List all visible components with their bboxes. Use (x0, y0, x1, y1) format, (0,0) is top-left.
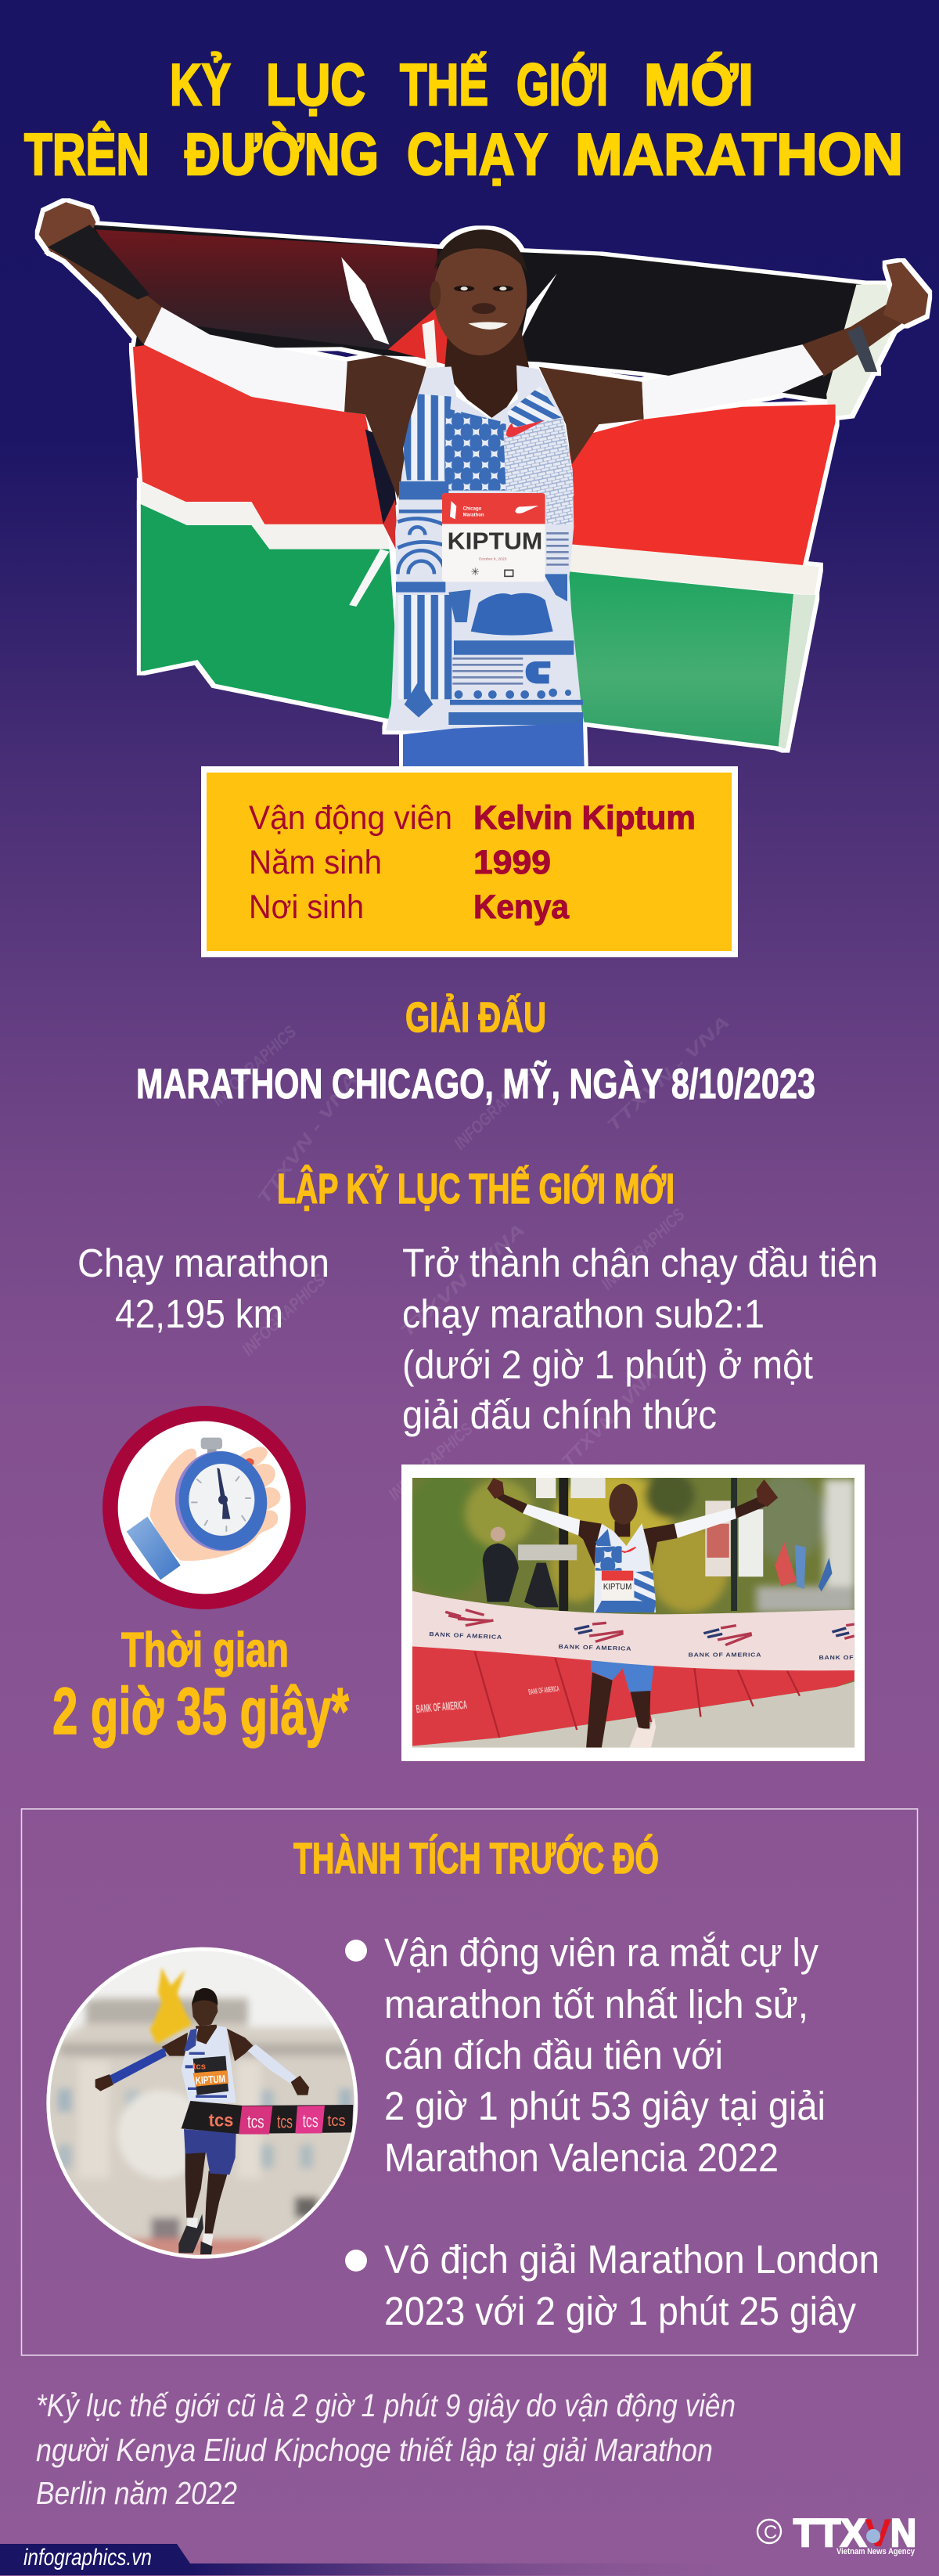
row: birth year: 1999 (473, 844, 551, 881)
watermarks: TTXVN - VNA (397, 1220, 529, 1342)
flag: left green panel (141, 504, 401, 722)
row: athlete (249, 799, 696, 837)
barrier details: BANK OF AMERICA (528, 1684, 560, 1697)
row: birthplace: Kenya (473, 888, 570, 926)
flag: spears and shield (341, 257, 557, 607)
barrier details (416, 1652, 800, 1738)
ribbon logos: BANK OF AMERICA (558, 1644, 631, 1652)
row: birthplace: Nơi sinh (249, 888, 364, 926)
singlet base (386, 366, 585, 730)
row: birth year (249, 844, 551, 881)
fingernail (245, 1458, 254, 1466)
website label: infographics.vn (23, 2545, 152, 2571)
text: first sub 2:01 runner (402, 1241, 878, 1437)
left white arm sleeve (144, 307, 347, 412)
watermarks: INFOGRAPHICS (238, 1270, 329, 1360)
text: first sub 2:01 runner: (dưới 2 giờ 1 phút) ở một (402, 1342, 813, 1387)
bullet: London win: Vô địch giải Marathon London (384, 2237, 880, 2282)
race bib: ✳ (471, 566, 480, 578)
flag: folded upper-left band (95, 229, 437, 349)
title: MARATHON (575, 121, 903, 187)
title: ĐƯỜNG (185, 121, 379, 187)
photo: London finish line (39, 1941, 368, 2270)
flag: right green panel (569, 571, 793, 747)
ribbon logos: BANK OF AMERICA (689, 1652, 761, 1658)
text: time label: Thời gian (121, 1623, 289, 1677)
footnote: Berlin năm 2022 (36, 2475, 237, 2511)
athlete info box (201, 766, 738, 957)
singlet pattern: brick area (503, 417, 574, 495)
bullet: London win: 2023 với 2 giờ 1 phút 25 giây (384, 2289, 856, 2333)
text: first sub 2:01 runner: chạy marathon sub2:1 (402, 1292, 765, 1336)
title (24, 52, 903, 187)
text: marathon distance: 42,195 km (115, 1292, 283, 1336)
finish tape: tcs (247, 2111, 264, 2131)
wristwatch (847, 326, 877, 372)
golden statue (150, 1967, 192, 2045)
left arm skin and hand (39, 202, 426, 499)
race bib: KIPTUM (448, 528, 542, 555)
watermarks: INFOGRAPHICS (450, 1065, 541, 1154)
singlet pattern: lower band (454, 640, 574, 655)
hero photo: Kelvin Kiptum holding the Kenyan flag (39, 202, 928, 767)
swoosh (506, 420, 545, 437)
watch hands (217, 1468, 230, 1519)
text: record time: 2 giờ 35 giây* (52, 1674, 349, 1748)
right white arm sleeve (642, 344, 823, 420)
ribbon logos: BANK OF AMERICA (818, 1655, 892, 1661)
race bib: Marathon (463, 513, 484, 517)
barrier details: BANK OF AMERICA (416, 1699, 468, 1716)
flag: left red panel (133, 344, 387, 525)
wrist cuff (127, 1517, 181, 1580)
watermarks: TTXVN - VNA (254, 1069, 362, 1208)
blurred trees (401, 1472, 855, 1612)
runner: KIPTUM (603, 1582, 631, 1591)
watermarks: INFOGRAPHICS (597, 1205, 689, 1294)
icon ring (103, 1406, 306, 1609)
heading: tournament: GIẢI ĐẤU (405, 994, 546, 1041)
text: first sub 2:01 runner: giải đấu chính thức (402, 1392, 717, 1437)
text: marathon distance (77, 1241, 329, 1336)
heading: new world record: LẬP KỶ LỤC THẾ GIỚI MỚI (277, 1165, 675, 1212)
singlet pattern: diagonal stripes (507, 386, 562, 428)
flag: black band (90, 225, 862, 399)
singlet pattern: arcs (398, 511, 444, 574)
road (412, 1681, 854, 1748)
icon: stopwatch in hand (103, 1406, 306, 1609)
finish tape: tcs (303, 2111, 318, 2131)
title: TRÊN (24, 121, 149, 187)
singlet pattern: upper-left stripes (403, 394, 452, 480)
copyright symbol (757, 2520, 781, 2543)
cameraman and camera (483, 1527, 577, 1607)
bullet: debut record: 2 giờ 1 phút 53 giây tại giải (384, 2084, 826, 2128)
footer ribbon (0, 2544, 751, 2575)
heading: previous achievements: THÀNH TÍCH TRƯỚC ĐÓ (293, 1833, 659, 1882)
race bib (442, 493, 545, 582)
title: GIỚI (516, 52, 608, 117)
finish tape: tcs (327, 2112, 346, 2130)
panel: previous achievements (22, 1809, 917, 2355)
singlet pattern: horizontal lines (452, 658, 523, 686)
photo: Chicago finish line (401, 1465, 892, 1761)
watermarks: INFOGRAPHICS (207, 1021, 300, 1110)
row: athlete: Kelvin Kiptum (473, 799, 696, 837)
TTXVN logo: N (890, 2511, 916, 2555)
watermarks (207, 1012, 733, 1504)
flag: right white stripe (569, 544, 819, 595)
ribbon logos: BANK OF AMERICA (429, 1631, 502, 1641)
finish tape: tcs (277, 2111, 293, 2131)
runner: tcs (193, 2062, 206, 2071)
flag: right pale edge (779, 594, 815, 749)
singlet pattern: cross band (399, 481, 448, 499)
blurred palace (50, 1994, 354, 2255)
singlet pattern: leaf (471, 593, 553, 636)
title: LỤC (266, 52, 365, 117)
title: THẾ (400, 52, 488, 117)
footnote: người Kenya Eliud Kipchoge thiết lập tại giải Marathon (36, 2432, 713, 2468)
singlet pattern: dots (405, 681, 583, 718)
stopwatch case (167, 1444, 275, 1558)
shorts (403, 722, 585, 767)
text: marathon distance: Chạy marathon (77, 1241, 329, 1285)
TTXVN logo: Vietnam News Agency (836, 2547, 916, 2556)
head (430, 229, 527, 355)
runner (487, 1478, 778, 1748)
bullet: debut record (345, 1930, 826, 2180)
watermarks: INFOGRAPHICS (385, 1419, 477, 1504)
singlet pattern: diamond lattice (444, 409, 506, 491)
right arm skin and hand (539, 262, 928, 464)
singlet and bib (386, 366, 585, 767)
finish tape (182, 2101, 353, 2135)
finish ribbon (412, 1591, 854, 1670)
flag: right red panel (569, 405, 836, 567)
stopwatch face (189, 1464, 254, 1536)
runner: KIPTUM (195, 2073, 225, 2087)
bullet: debut record: marathon tốt nhất lịch sử, (384, 1982, 808, 2027)
text: first sub 2:01 runner: Trở thành chân chạy đầu tiên (402, 1241, 878, 1285)
title: KỶ (170, 52, 231, 117)
watermarks: TTXVN - VNA (603, 1012, 733, 1136)
singlet pattern: letter C (526, 661, 550, 683)
TTXVN logo: V (865, 2511, 892, 2555)
bullet: London win (345, 2237, 880, 2333)
finish tape: tcs (209, 2110, 233, 2131)
flag: white right edge (826, 285, 898, 417)
crown (201, 1438, 222, 1454)
TTXVN logo: TTX (793, 2511, 866, 2555)
background banners and poles (536, 1478, 832, 1611)
row: birth year: Năm sinh (249, 844, 382, 881)
title: CHẠY (407, 121, 548, 187)
bullet: debut record: Vận động viên ra mắt cự ly (384, 1930, 818, 1975)
singlet pattern: lower-left stripes (398, 595, 452, 699)
red barriers (412, 1646, 854, 1746)
bullet: debut record: cán đích đầu tiên với (384, 2033, 723, 2077)
ribbon logos (429, 1610, 892, 1661)
bullet: debut record: Marathon Valencia 2022 (384, 2135, 779, 2180)
hand (150, 1447, 281, 1561)
copyright symbol: C (764, 2522, 777, 2543)
race bib: Chicago (463, 507, 482, 512)
singlet hem (448, 712, 583, 725)
footnote: *Kỷ lục thế giới cũ là 2 giờ 1 phút 9 giây do vận động viên (36, 2387, 736, 2423)
tick marks (192, 1477, 250, 1531)
row: athlete: Vận động viên (249, 799, 452, 837)
race bib: October 8, 2023 (479, 557, 507, 562)
watermarks: TTXVN - VNA (558, 1364, 661, 1471)
row: birthplace (249, 888, 570, 926)
runner (95, 1988, 309, 2254)
flag: left white stripe (141, 481, 389, 549)
neck (444, 330, 530, 422)
TTXVN logo (793, 2511, 916, 2556)
title: MỚI (644, 52, 754, 117)
footnote (36, 2387, 736, 2511)
